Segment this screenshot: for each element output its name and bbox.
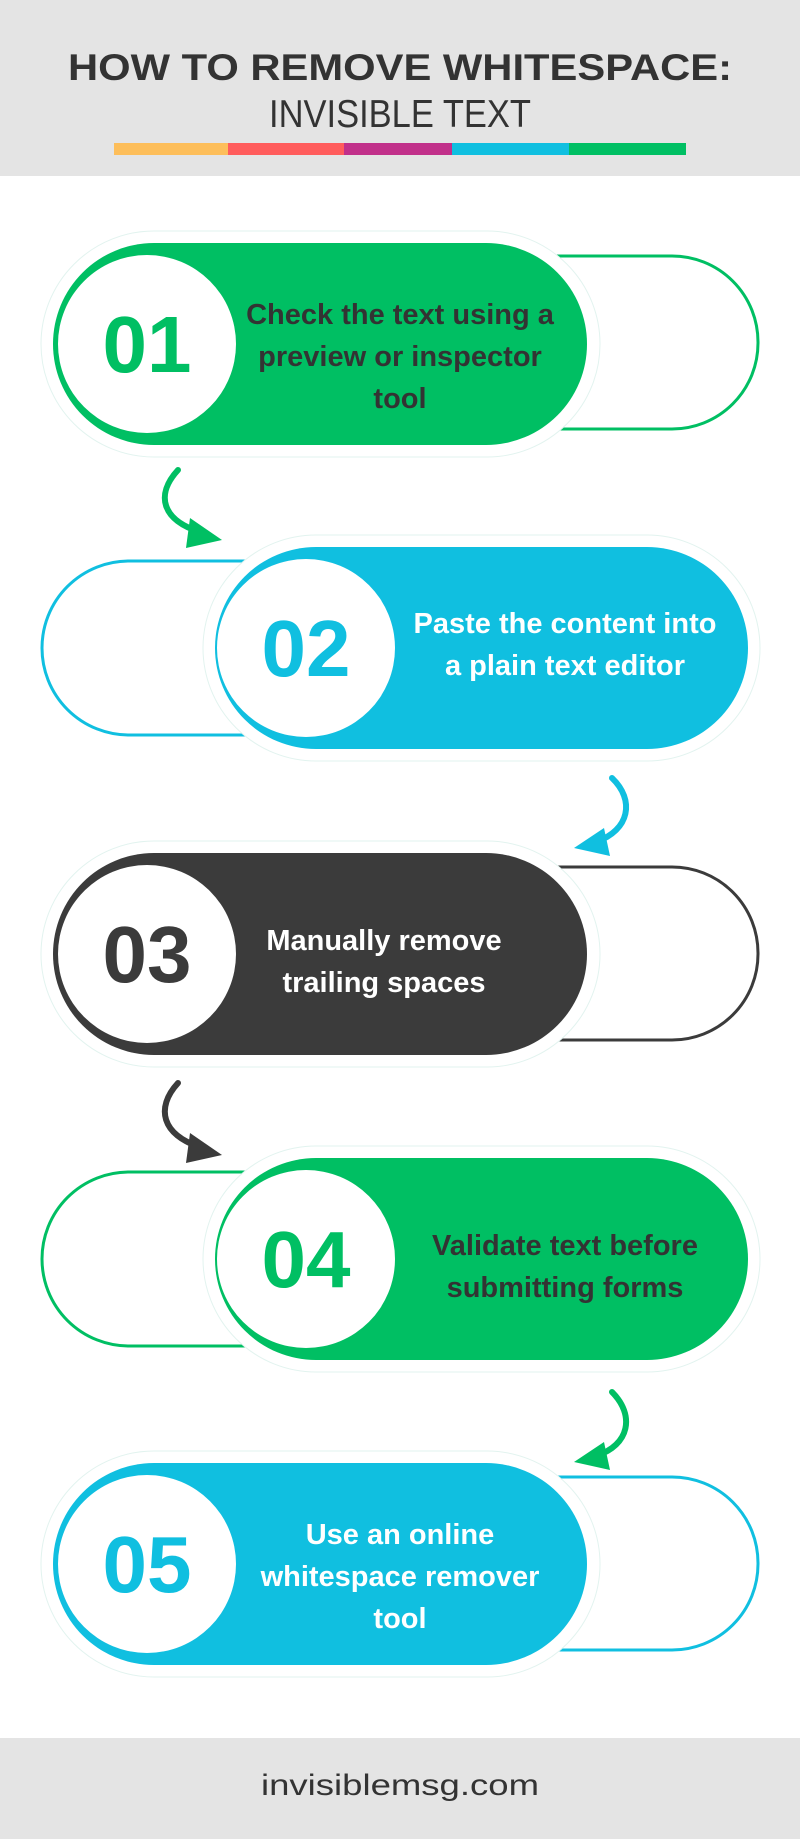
step text: Paste the content into <box>414 608 716 640</box>
step text: trailing spaces <box>282 967 486 999</box>
number 04: 04 <box>262 1215 351 1304</box>
header panel <box>0 0 800 176</box>
step text: Manually remove <box>266 925 502 957</box>
arrow 3 <box>165 1083 222 1163</box>
step text: Validate text before <box>432 1230 698 1262</box>
number 01: 01 <box>103 300 191 389</box>
footer <box>0 1738 800 1839</box>
color bar <box>114 143 686 155</box>
step 02 <box>42 535 760 761</box>
number 03: 03 <box>103 910 191 999</box>
arrow 2 <box>574 778 626 856</box>
title: HOW TO REMOVE WHITESPACE: <box>68 47 732 88</box>
number 02: 02 <box>262 604 350 693</box>
number 05: 05 <box>103 1520 191 1609</box>
step text: tool <box>373 383 427 415</box>
subtitle: INVISIBLE TEXT <box>269 93 531 136</box>
arrow 4 <box>574 1392 626 1470</box>
step text: tool <box>373 1603 427 1635</box>
footer url: invisiblemsg.com <box>261 1769 539 1802</box>
step 01 <box>41 231 758 457</box>
step 04 <box>42 1146 760 1372</box>
step text: submitting forms <box>447 1272 683 1304</box>
step text: a plain text editor <box>445 650 685 682</box>
step 05 <box>41 1451 758 1677</box>
step text: preview or inspector <box>258 341 542 373</box>
step text: Check the text using a <box>246 299 555 331</box>
arrow 1 <box>165 470 222 548</box>
step 03 <box>41 841 758 1067</box>
step text: whitespace remover <box>260 1561 539 1593</box>
step text: Use an online <box>306 1519 494 1551</box>
